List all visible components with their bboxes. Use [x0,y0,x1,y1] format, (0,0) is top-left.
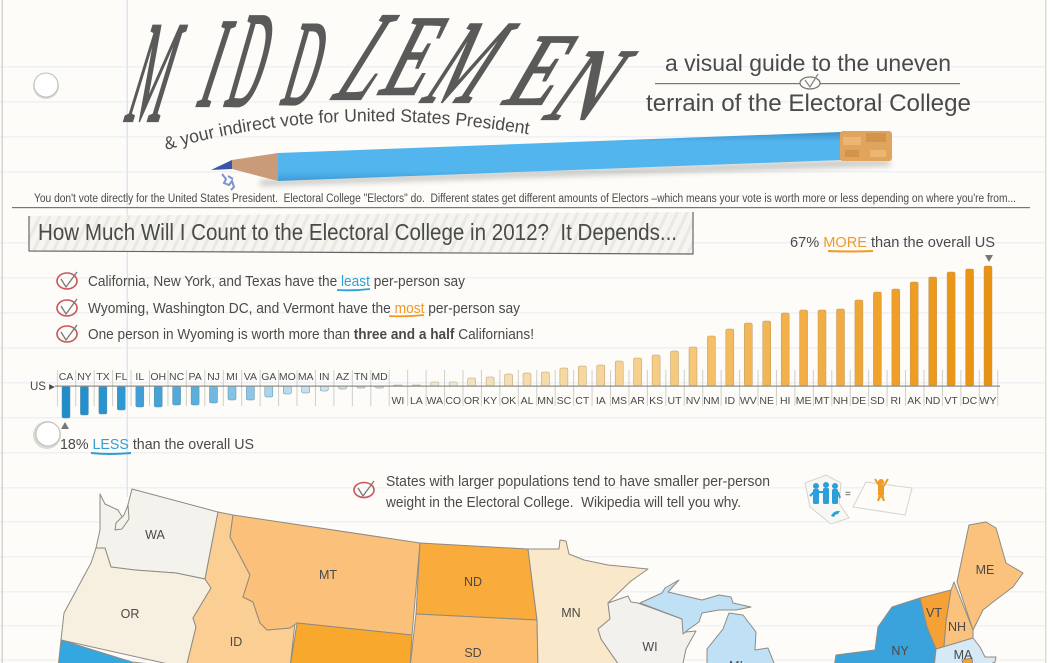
pencil scribble [222,174,234,190]
state labels below axis: RI [891,395,901,407]
state: RI [962,658,973,663]
state labels on map: ID [230,635,242,649]
section heading box [29,212,693,254]
state labels below axis: CO [445,395,461,407]
blue bars below axis [62,386,384,418]
state labels above axis: VA [244,371,257,383]
icon: California people equal Wyoming person: = [845,489,851,500]
title: D [271,0,342,130]
state labels below axis: ID [725,395,735,407]
state labels on map: MN [561,606,581,620]
state labels on map: MA [954,648,973,662]
state labels below axis: IA [596,395,606,407]
map of states [58,489,1023,663]
state: MT [230,515,420,635]
note: larger populations: weight in the Electoral College. Wikipedia will tell you why. [385,495,741,511]
state labels below axis: WA [427,395,443,407]
state labels above axis [59,371,388,383]
state labels below axis: AR [630,395,645,407]
state: WY [290,623,412,663]
state: ND [416,543,537,620]
state labels above axis: OH [150,371,166,383]
state labels below axis: NM [703,395,720,407]
state labels on map: VT [926,606,942,620]
state: OR [61,548,211,663]
state labels above axis: MO [279,371,296,383]
state labels below axis: DE [852,395,866,407]
state labels above axis: GA [261,371,276,383]
bullet: least: California, New York, and Texas have the least per-person say [88,274,466,290]
state: SD [410,614,538,663]
state labels below axis: AL [521,395,534,407]
state labels above axis: NJ [207,371,220,383]
state labels above axis: CA [59,371,73,383]
state labels above axis: TN [354,371,368,383]
state labels below axis: MT [814,395,830,407]
state labels on map: SD [464,646,482,660]
state labels on map: ME [976,563,994,577]
state: ID [186,512,295,663]
state labels above axis: MA [298,371,314,383]
state labels above axis: MD [371,371,388,383]
callout: 67% more [790,234,995,262]
punched hole top [33,73,59,99]
state labels below axis: VT [944,395,958,407]
state labels below axis: MS [611,395,627,407]
callout: 18% less [60,422,254,454]
state labels above axis: IL [135,371,144,383]
state: WI [598,596,696,663]
state labels below axis: WI [391,395,404,407]
axis line [55,386,1000,387]
state labels below axis: LA [410,395,423,407]
state labels below axis: NE [759,395,774,407]
state labels above axis: NC [169,371,185,383]
punched hole middle [33,421,61,449]
state labels below axis: AK [907,395,921,407]
pencil [211,131,892,190]
callout: 67% more: 67% MORE than the overall US [790,234,995,251]
tagline: line two: terrain of the Electoral College [646,90,971,117]
state: CA [58,640,132,663]
state labels on map: NY [891,644,909,658]
state: MI lower peninsula [707,613,776,663]
state: MA [934,638,996,663]
title [113,0,656,152]
state labels below axis: NV [686,395,700,407]
state labels on map: WA [145,528,165,542]
icon: California people equal Wyoming person [805,475,912,524]
note: larger populations [354,474,770,511]
section heading: How Much Will I Count to the Electoral College in 2012? It Depends... [38,219,677,245]
state labels below axis: OR [464,395,480,407]
title: M [401,0,539,128]
state: MN [528,540,648,663]
note: larger populations: States with larger populations tend to have smaller per-person [386,474,770,490]
state: MI upper peninsula [640,580,751,634]
state labels below axis: WY [980,395,996,407]
state labels below axis: ND [925,395,941,407]
title: N [524,28,656,141]
bullet: three and a half: One person in Wyoming is worth more than three and a half Californians! [88,327,534,343]
chart ticks [57,370,999,406]
state labels below axis: CT [575,395,590,407]
state: NH [944,582,973,647]
state labels below axis: SC [557,395,572,407]
icon: tagline check [800,74,820,89]
subtitle arc: & your indirect vote for United States President [166,108,530,150]
state labels below axis: HI [780,395,790,407]
state labels above axis: FL [115,371,128,383]
state labels above axis: NY [77,371,92,383]
state labels above axis: AZ [336,371,350,383]
title: E [486,13,599,126]
state labels on map: OR [121,607,139,621]
state labels below axis: ME [796,395,811,407]
bullet: most: Wyoming, Washington DC, and Vermont have the most per-person say [88,301,521,317]
state labels below axis [391,395,996,407]
state labels below axis: WV [740,395,757,407]
state labels above axis: MI [226,371,238,383]
state labels below axis: MN [537,395,554,407]
state: NY [834,598,936,663]
orange bars above axis [394,266,992,386]
state labels on map: NH [948,620,966,634]
tagline: line one: a visual guide to the uneven [665,50,951,76]
state labels below axis: NH [833,395,848,407]
state: WA [96,489,218,579]
state labels below axis: KS [649,395,663,407]
axis label: US ▸ [30,381,55,393]
state: VT [920,590,951,649]
state labels above axis: TX [96,371,110,383]
state labels on map: ND [464,575,482,589]
tagline rule [655,83,960,84]
state labels below axis: UT [668,395,682,407]
state labels on map: WI [642,640,658,654]
state labels above axis: IN [319,371,329,383]
state labels on map [121,528,994,663]
intro rule [12,207,1030,208]
state: ME [957,522,1023,630]
state labels below axis: KY [483,395,497,407]
state labels below axis: SD [870,395,885,407]
bar chart: weight by state [30,266,1000,418]
state labels above axis: PA [188,371,202,383]
state labels below axis: DC [962,395,978,407]
callout: 18% less: 18% LESS than the overall US [60,436,254,453]
state labels below axis: OK [501,395,516,407]
state: NV [132,662,186,663]
state labels on map: MT [319,568,337,582]
